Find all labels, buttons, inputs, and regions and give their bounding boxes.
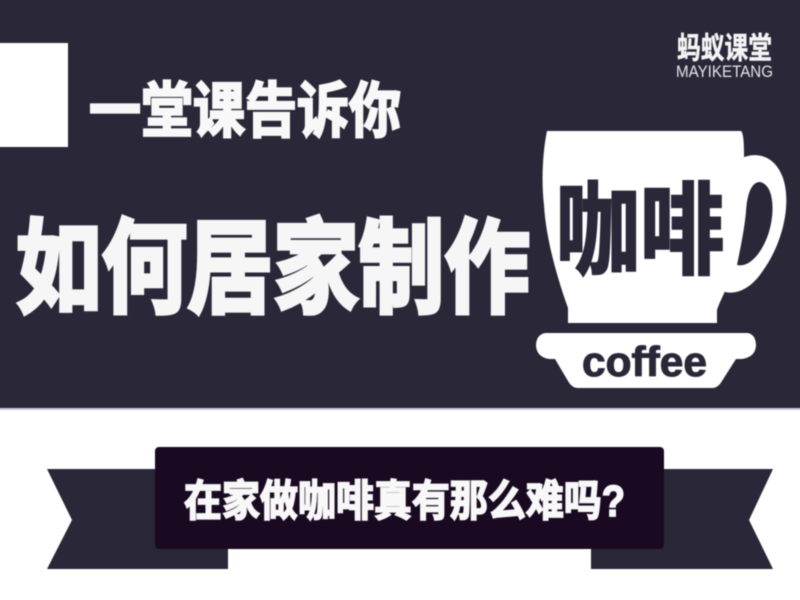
white square accent	[0, 43, 68, 147]
ribbon banner	[47, 447, 773, 569]
main title: 如何居家制作	[16, 212, 530, 327]
header background panel	[0, 0, 800, 409]
ribbon heading: 在家做咖啡真有那么难吗?	[184, 477, 625, 525]
cup body	[543, 131, 744, 323]
brand name: 蚂蚁课堂	[677, 31, 772, 65]
cup label: 咖啡	[556, 175, 724, 288]
icon: saucer	[536, 333, 756, 388]
header bottom edge	[0, 408, 800, 410]
saucer plate	[536, 333, 756, 388]
ribbon left tail	[47, 469, 228, 569]
cup handle	[725, 155, 786, 293]
brand pinyin: MAYIKETANG	[676, 64, 773, 81]
subtitle: 一堂课告诉你	[89, 77, 401, 145]
ribbon centre band	[155, 447, 664, 549]
ribbon right tail	[591, 469, 773, 569]
icon: coffee cup	[543, 131, 786, 323]
brand logo	[676, 31, 773, 81]
saucer text: coffee	[582, 338, 707, 385]
